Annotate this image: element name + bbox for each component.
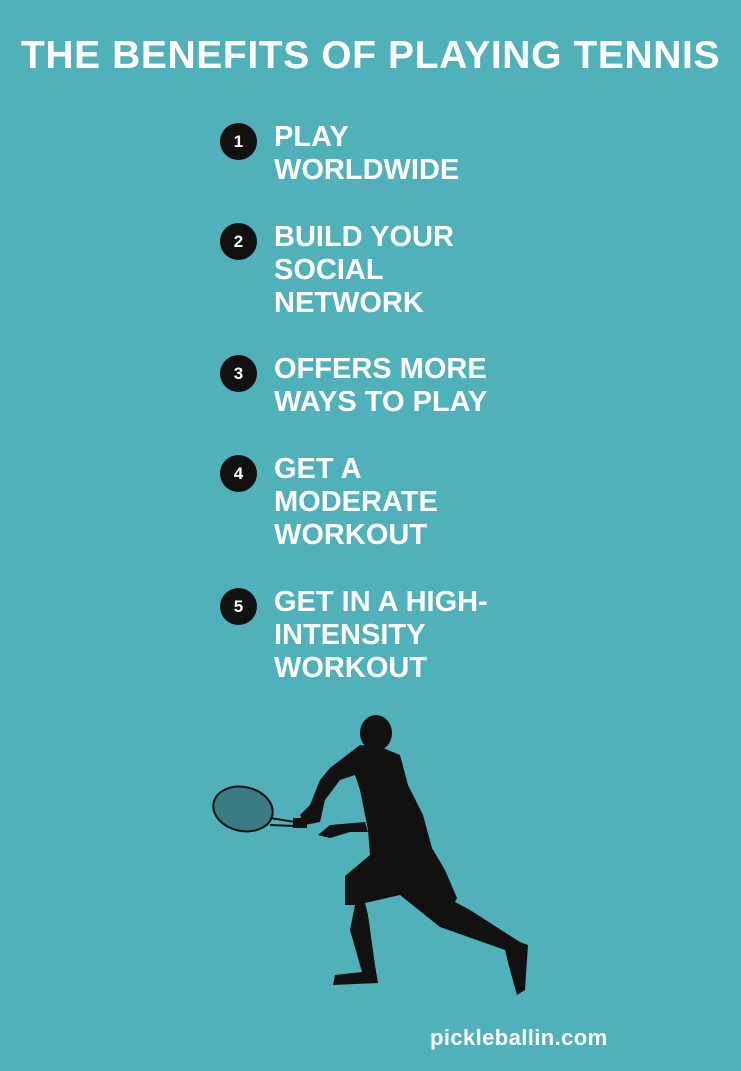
item 2: 2 bbox=[234, 232, 243, 251]
item 1: WORLDWIDE bbox=[274, 154, 459, 186]
item 2: BUILD YOUR bbox=[274, 221, 454, 253]
item 4: WORKOUT bbox=[274, 519, 427, 551]
item 2 bbox=[220, 221, 454, 319]
item 5: INTENSITY bbox=[274, 619, 425, 651]
item 2: SOCIAL bbox=[274, 254, 384, 286]
item 2: NETWORK bbox=[274, 287, 424, 319]
item 4: MODERATE bbox=[274, 486, 438, 518]
item 1: PLAY bbox=[274, 121, 349, 153]
item 4 bbox=[220, 453, 438, 551]
item 1 bbox=[220, 121, 459, 186]
footer url: pickleballin.com bbox=[430, 1025, 608, 1050]
item 3: WAYS TO PLAY bbox=[274, 386, 487, 418]
racket bbox=[209, 781, 307, 837]
item 1: 1 bbox=[234, 132, 243, 151]
title: THE BENEFITS OF PLAYING TENNIS bbox=[21, 34, 720, 77]
item 5: WORKOUT bbox=[274, 652, 427, 684]
item 5: 5 bbox=[234, 597, 243, 616]
item 4: GET A bbox=[274, 453, 362, 485]
item 5: GET IN A HIGH- bbox=[274, 586, 488, 618]
item 3: OFFERS MORE bbox=[274, 353, 487, 385]
item 5 bbox=[220, 586, 488, 684]
item 3: 3 bbox=[234, 364, 243, 383]
item 3 bbox=[220, 353, 487, 418]
item 4: 4 bbox=[234, 464, 243, 483]
